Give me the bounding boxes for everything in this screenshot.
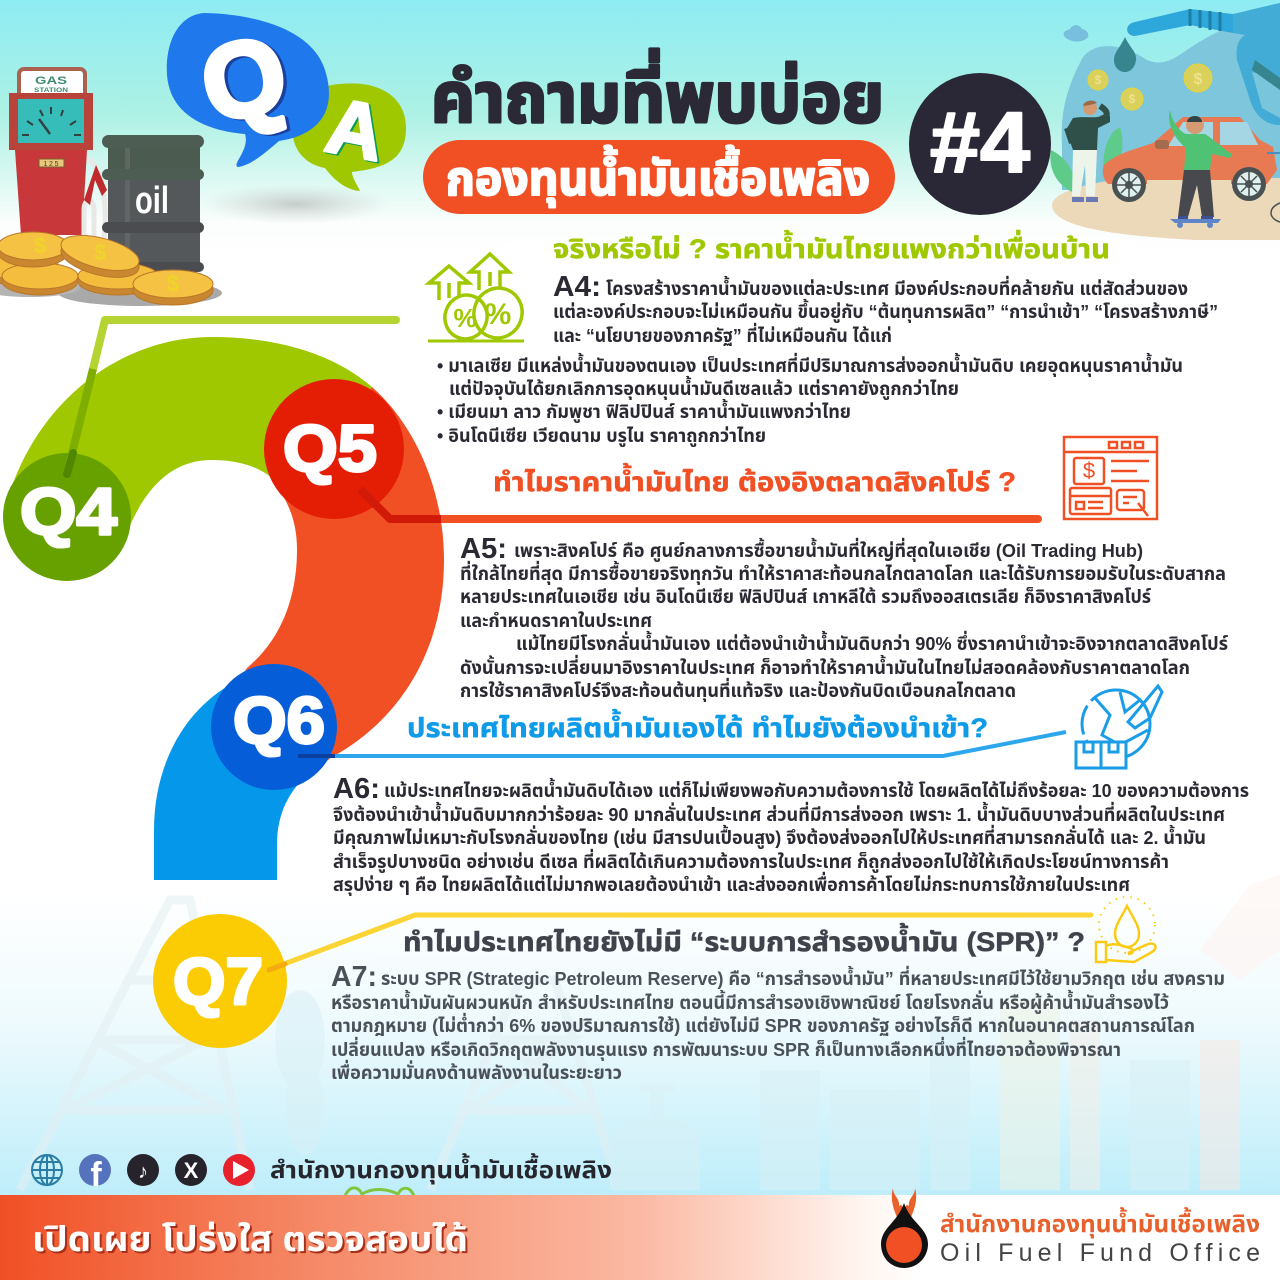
illustration: oil barrel xyxy=(102,135,204,272)
icon: facebook xyxy=(79,1154,111,1194)
illustration: car, people and fuel nozzle: $ xyxy=(1129,92,1136,106)
answer A7 xyxy=(331,961,1225,1083)
icon: x: X xyxy=(184,1158,199,1183)
answer A5: A5: xyxy=(460,533,507,565)
illustration: gold coins: $ xyxy=(34,233,46,258)
circle Q6: Q6 xyxy=(233,683,325,757)
bullet list A4: • มาเลเซีย มีแหล่งน้ำมันของตนเอง เป็นประเทศที่มีปริมาณการส่งออกน้ำมันดิบ เคยอุดหนุนราคาน้ำมัน xyxy=(437,352,1183,377)
connector line Q6 xyxy=(330,732,1066,756)
icon: x xyxy=(175,1154,207,1186)
speech bubble Q: Q xyxy=(191,13,297,146)
circle Q5 xyxy=(264,379,441,519)
circle Q7: Q7 xyxy=(173,944,263,1018)
logo thai name: สำนักงานกองทุนน้ำมันเชื้อเพลิง xyxy=(940,1207,1260,1239)
bullet list A4: • อินโดนีเซีย เวียดนาม บรูไน ราคาถูกกว่าไทย xyxy=(437,425,766,447)
pump sign: STATION xyxy=(34,88,68,94)
icon: hand holding oil drop xyxy=(1096,897,1155,962)
icon: tiktok: ♪ xyxy=(138,1161,148,1183)
title pill xyxy=(423,140,895,214)
background: faint oil and refinery silhouettes xyxy=(20,875,1280,1190)
heading Q6: ประเทศไทยผลิตน้ำมันเองได้ ทำไมยังต้องนำเข้า? xyxy=(407,709,988,743)
pump sign xyxy=(19,69,85,99)
answer A5: แม้ไทยมีโรงกลั่นน้ำมันเอง แต่ต้องนำเข้าน้ำมันดิบกว่า 90% ซึ่งราคานำเข้าจะอิงจากตลาดสิงคโปร์ xyxy=(516,630,1228,654)
illustration: gas pump xyxy=(9,69,107,238)
answer A6: A6: xyxy=(333,773,380,805)
icon: percent growth: % xyxy=(485,298,511,331)
speech bubble A: A xyxy=(321,82,393,179)
connector line Q5 xyxy=(390,515,1038,523)
person on skateboard xyxy=(1169,110,1232,228)
answer A4: A4: xyxy=(553,271,601,303)
slogan: เปิดเผย โปร่งใส ตรวจสอบได้ xyxy=(34,1222,470,1261)
speech bubble A: A xyxy=(320,81,392,178)
shadow under speech bubbles xyxy=(201,184,391,224)
answer A5: หลายประเทศในเอเชีย เช่น อินโดนีเซีย ฟิลิปปินส์ เกาหลีใต้ รวมถึงออสเตรเลีย ก็อิงราคาสิงคโปร์ xyxy=(460,585,1151,607)
illustration: gold coins xyxy=(0,229,222,306)
green arcs peeking above footer band xyxy=(345,1188,414,1196)
logo english name: Oil Fuel Fund Office xyxy=(940,1239,1260,1267)
footer organisation name: สำนักงานกองทุนน้ำมันเชื้อเพลิง xyxy=(270,1153,612,1185)
question mark: blue stem xyxy=(154,686,310,880)
icon: globe import xyxy=(1076,686,1162,768)
icon: market dashboard xyxy=(1064,437,1157,519)
issue number badge xyxy=(909,73,1051,215)
answer A7: หรือราคาน้ำมันผันผวนหนัก สำหรับประเทศไทย ตอนนี้มีการสำรองเชิงพาณิชย์ โดยโรงกลั่น หรือผู้ค้าน้ำมันสำรองไว้ xyxy=(331,989,1169,1014)
speech bubble Q xyxy=(167,13,329,167)
answer A5: เพราะสิงคโปร์ คือ ศูนย์กลางการซื้อขายน้ำมันที่ใหญ่ที่สุดในเอเชีย (Oil Trading Hub) xyxy=(514,537,1143,562)
illustration: gold coins: $ xyxy=(94,240,106,265)
answer A5: และกำหนดราคาในประเทศ xyxy=(460,610,652,631)
logo: oil fuel fund office xyxy=(881,1188,1260,1268)
illustration: gas pump: 125 xyxy=(44,161,59,168)
bullet list A4: แต่ปัจจุบันได้ยกเลิกการอุดหนุนน้ำมันดีเซลแล้ว แต่ราคายังถูกกว่าไทย xyxy=(449,375,959,400)
bullet list A4 xyxy=(437,352,1183,447)
social icons xyxy=(32,1154,255,1194)
speech bubble A xyxy=(293,81,406,191)
answer A5: ที่ใกล้ไทยที่สุด มีการซื้อขายจริงทุกวัน ทำให้ราคาสะท้อนกลไกตลาดโลก และได้รับการยอมรับในระดับสากล xyxy=(460,560,1226,585)
question mark: green arc xyxy=(12,337,372,530)
answer A4: โครงสร้างราคาน้ำมันของแต่ละประเทศ มีองค์ประกอบที่คล้ายกัน แต่สัดส่วนของ xyxy=(606,275,1188,299)
speech bubble Q: Q xyxy=(195,15,300,147)
answer A5: ดังนั้นการจะเปลี่ยนมาอิงราคาในประเทศ ก็อาจทำให้ราคาน้ำมันในไทยไม่สอดคล้องกับราคาตลาดโลก xyxy=(460,654,1190,678)
barrel label: oil xyxy=(135,180,169,222)
answer A7: เพื่อความมั่นคงด้านพลังงานในระยะยาว xyxy=(331,1059,622,1083)
pump sign: GAS xyxy=(35,75,67,87)
logo flames xyxy=(892,1188,916,1217)
answer A7: ตามกฎหมาย (ไม่ต่ำกว่า 6% ของปริมาณการใช้) แต่ยังไม่มี SPR ของภาครัฐ อย่างไรก็ดี หากในอนาคตสถานการณ์โลก xyxy=(331,1012,1195,1036)
answer A6 xyxy=(333,773,1249,896)
answer A7: ระบบ SPR (Strategic Petroleum Reserve) คือ “การสำรองน้ำมัน” ที่หลายประเทศมีไว้ใช้ยามวิกฤต เช่น สงคราม xyxy=(381,965,1225,989)
circle Q4 xyxy=(3,425,131,581)
heading Q7: ทำไมประเทศไทยยังไม่มี “ระบบการสำรองน้ำมัน (SPR)” ? xyxy=(403,923,1085,957)
logo drop xyxy=(881,1203,928,1268)
illustration: car, people and fuel nozzle: $ xyxy=(1095,73,1102,87)
heading Q5: ทำไมราคาน้ำมันไทย ต้องอิงตลาดสิงคโปร์ ? xyxy=(493,463,1016,497)
icon: facebook: f xyxy=(90,1156,102,1194)
title: คำถามที่พบบ่อย xyxy=(431,49,884,137)
illustration: gold coins: $ xyxy=(167,271,179,296)
answer A6: มีคุณภาพไม่เหมาะกับโรงกลั่นของไทย (เช่น มีสารปนเปื้อนสูง) จึงต้องส่งออกไปให้ประเทศที่สามารถกลั่นได้ และ 2. น้ำมัน xyxy=(333,824,1206,849)
answer A4 xyxy=(553,271,1218,346)
icon: youtube xyxy=(223,1154,255,1186)
circle Q5: Q5 xyxy=(283,411,377,485)
illustration: car, people and fuel nozzle: $ xyxy=(1194,71,1203,88)
answer A6: สำเร็จรูปบางชนิด อย่างเช่น ดีเซล ที่ผลิตได้เกินความต้องการในประเทศ ก็ถูกส่งออกไปใช้ให้เกิดประโยชน์ทางการค้า xyxy=(333,848,1169,873)
icon: percent growth: % xyxy=(453,303,477,333)
issue number badge: #4 xyxy=(930,95,1030,191)
icon: percent growth xyxy=(428,254,529,345)
circle Q7 xyxy=(153,914,287,1048)
answer A7: เปลี่ยนแปลง หรือเกิดวิกฤตพลังงานรุนแรง การพัฒนาระบบ SPR ก็เป็นทางเลือกหนึ่งที่ไทยอาจต้องพิจารณา xyxy=(331,1036,1121,1061)
answer A5 xyxy=(460,533,1228,702)
bullet list A4: • เมียนมา ลาว กัมพูชา ฟิลิปปินส์ ราคาน้ำมันแพงกว่าไทย xyxy=(437,398,851,423)
title pill: กองทุนน้ำมันเชื้อเพลิง xyxy=(446,145,870,208)
person standing xyxy=(1066,101,1110,202)
heading Q4: จริงหรือไม่ ? ราคาน้ำมันไทยแพงกว่าเพื่อนบ้าน xyxy=(553,230,1110,264)
footer band xyxy=(0,1195,1280,1280)
circle Q6 xyxy=(211,664,337,790)
answer A6: สรุปง่าย ๆ คือ ไทยผลิตได้แต่ไม่มากพอเลยต้องนำเข้า และส่งออกเพื่อการค้าโดยไม่กระทบการใช้ภายในประเทศ xyxy=(333,871,1130,896)
answer A6: จึงต้องนำเข้าน้ำมันดิบมากกว่าร้อยละ 90 มากลั่นในประเทศ ส่วนที่มีการส่งออก เพราะ 1. น้ำมันดิบบางส่วนที่ผลิตในประเทศ xyxy=(333,801,1225,825)
icon: website xyxy=(32,1155,62,1185)
answer A7: A7: xyxy=(331,961,377,993)
icon: market dashboard: $ xyxy=(1083,458,1095,483)
slogan: เปิดเผย โปร่งใส ตรวจสอบได้ xyxy=(32,1220,468,1259)
connector line Q4 xyxy=(79,320,396,425)
answer A6: แม้ประเทศไทยจะผลิตน้ำมันดิบได้เอง แต่ก็ไม่เพียงพอกับความต้องการใช้ โดยผลิตได้ไม่ถึงร้อยละ 10 ของความต้องการ xyxy=(384,777,1249,801)
illustration: car, people and fuel nozzle xyxy=(1050,3,1280,240)
icon: tiktok xyxy=(127,1154,159,1186)
question mark: red arc xyxy=(232,387,444,785)
answer A5: การใช้ราคาสิงคโปร์จึงสะท้อนต้นทุนที่แท้จริง และป้องกันบิดเบือนกลไกตลาด xyxy=(460,677,1016,702)
connector line Q7 xyxy=(268,915,1091,970)
circle Q4: Q4 xyxy=(20,474,117,548)
answer A4: และ “นโยบายของภาครัฐ” ที่ไม่เหมือนกัน ได้แก่ xyxy=(553,322,892,346)
answer A4: แต่ละองค์ประกอบจะไม่เหมือนกัน ขึ้นอยู่กับ “ต้นทุนการผลิต” “การนำเข้า” “โครงสร้างภาษี” xyxy=(553,298,1218,323)
